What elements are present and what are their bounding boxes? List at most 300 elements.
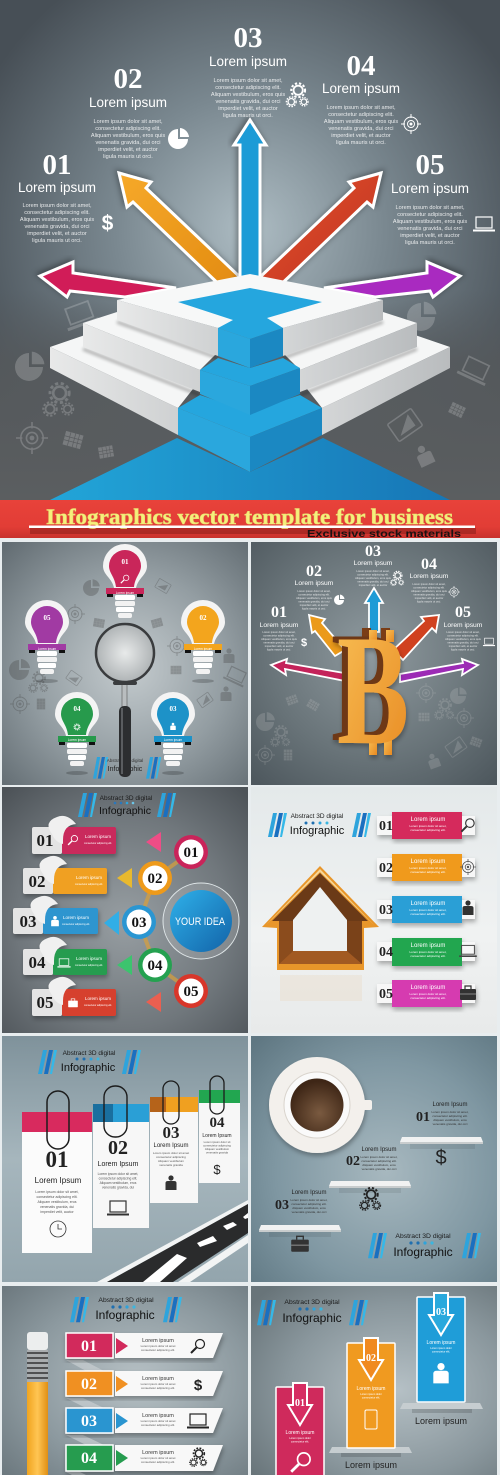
item 03 text: Lorem ipsum dolor sit amet, — [290, 1198, 328, 1202]
bitcoin item 01 — [260, 604, 307, 652]
bulb 01 — [103, 544, 147, 627]
row 05: Lorem ipsum — [411, 985, 445, 991]
card 03 blue: 03 — [436, 1307, 446, 1318]
banner subtitle: Exclusive stock materials — [307, 528, 461, 540]
logo behind magnifier: Abstract 3D digital — [107, 758, 143, 763]
row 01: consectetur adipiscing elit. — [141, 1348, 175, 1352]
row 01: 01 — [81, 1338, 97, 1355]
card 01: Lorem Ipsum — [35, 1176, 82, 1185]
bulb 02: Lorem ipsum — [194, 647, 213, 651]
arrow: 05 purple — [324, 262, 460, 297]
shelf lower — [329, 1447, 412, 1457]
bitcoin item 04: venenatis gravida, dui orci — [413, 592, 445, 596]
card 02: Lorem Ipsum — [98, 1161, 139, 1168]
icon: target — [401, 114, 421, 134]
item 01 text: Lorem ipsum — [18, 180, 96, 195]
faded background icons — [15, 299, 493, 468]
card 05: consectetur adipiscing elit. — [84, 1004, 112, 1007]
card 02 — [23, 856, 107, 894]
circle 04: 04 — [148, 958, 163, 974]
row 04: consectetur adipiscing elit. — [141, 1460, 175, 1464]
item 02 text: Lorem Ipsum — [361, 1147, 397, 1153]
magnifying glass — [96, 624, 154, 777]
card 01: Lorem ipsum — [85, 834, 111, 839]
card 01: Lorem ipsum dolor sit amet, — [35, 1190, 79, 1194]
banner rule — [29, 526, 475, 528]
item 02 text: Lorem ipsum dolor sit amet, — [360, 1155, 398, 1159]
panel: bookmark cards — [251, 1286, 497, 1475]
paper folds — [66, 1360, 104, 1475]
card 04: venenatis gravida — [206, 1150, 228, 1154]
row 04: Lorem ipsum — [142, 1450, 174, 1456]
bitcoin item 01: 01 — [271, 604, 287, 621]
card 01 pink: 01 — [295, 1398, 305, 1409]
circle 03: 03 — [132, 915, 146, 931]
card 04: Lorem ipsum — [76, 956, 102, 961]
header logo — [70, 1297, 182, 1322]
card 01: 01 — [46, 1147, 68, 1172]
panel: light bulbs and magnifier — [2, 542, 249, 785]
panel: coffee cup and shelves — [251, 1036, 497, 1282]
header logo — [368, 1233, 481, 1259]
carpet — [50, 438, 450, 500]
bitcoin item 01: Lorem ipsum — [260, 622, 299, 629]
card 05: Lorem ipsum — [85, 996, 111, 1001]
lower shelf label: Lorem ipsum — [345, 1460, 397, 1470]
item 03 text: ligula mauris ut orci. — [223, 113, 273, 119]
bulb 02 — [181, 600, 225, 683]
card 04: Aliquam vestibulum — [205, 1147, 230, 1151]
row 03: 03 — [81, 1413, 97, 1430]
item 04 text: Lorem ipsum dolor sit amet, — [326, 105, 396, 111]
bulb 01: 01 — [122, 558, 129, 566]
bitcoin item 02 — [295, 563, 344, 610]
bulb 05: 05 — [44, 614, 51, 622]
row 02: consectetur adipiscing elit. — [141, 1386, 175, 1390]
card 02: Lorem ipsum — [76, 875, 102, 880]
your idea disc: YOUR IDEA — [175, 916, 226, 928]
card 01 — [22, 1091, 92, 1253]
card 02: Lorem ipsum dolor sit amet, — [98, 1172, 138, 1176]
row 01: Lorem ipsum dolor sit amet — [141, 1344, 176, 1348]
item 01 text: 01 — [42, 149, 72, 181]
row 03: Lorem ipsum dolor sit amet — [141, 1419, 176, 1423]
item 01 text: 01 — [416, 1110, 430, 1125]
bulb 03 — [151, 692, 195, 775]
bitcoin item 02: consectetur adipiscing elit. — [298, 592, 330, 596]
row 03: 03 — [379, 903, 393, 918]
row 02: Lorem ipsum — [142, 1376, 174, 1382]
item 03 text: Lorem Ipsum — [291, 1190, 327, 1196]
bulb 04: Lorem ipsum — [68, 738, 87, 742]
card 02: 02 — [108, 1137, 128, 1159]
header logo: Abstract 3D digital — [100, 795, 153, 802]
shelf upper — [400, 1403, 483, 1413]
circle 01 — [174, 835, 208, 869]
row 02: $ — [194, 1377, 203, 1394]
row 03: Lorem ipsum — [411, 901, 445, 907]
arrow: 01 pink — [40, 262, 176, 297]
card 03 blue: consectetur elit. — [432, 1350, 450, 1354]
row 03: consectetur adipiscing elit. — [410, 912, 446, 916]
header logo: Infographic — [95, 1308, 155, 1322]
header logo — [257, 1299, 368, 1325]
card 03: Lorem ipsum — [63, 915, 89, 920]
header logo: Infographic — [282, 1311, 342, 1325]
row 05: consectetur adipiscing elit. — [410, 996, 446, 1000]
card 02: consectetur adipiscing elit. — [99, 1176, 137, 1180]
bitcoin item 05: venenatis gravida, dui orci — [447, 640, 479, 644]
icon: gears — [360, 1188, 381, 1210]
card 03: venenatis gravida — [159, 1163, 183, 1167]
card 03: 03 — [162, 1123, 180, 1142]
row 05 — [377, 980, 476, 1007]
card 01 — [32, 816, 116, 854]
item 01 text: consectetur adipiscing elit. — [24, 210, 90, 216]
row 02: Lorem ipsum — [411, 859, 445, 865]
bitcoin item 03: imperdiet velit, et auctor — [359, 583, 387, 587]
item 05 text: ligula mauris ut orci. — [405, 240, 455, 246]
item 04 text: imperdiet velit, et auctor — [331, 133, 391, 139]
circle 03 — [122, 905, 156, 939]
step 3 — [50, 335, 200, 408]
item 05 text: imperdiet velit, et auctor — [400, 233, 460, 239]
house reflection — [280, 975, 362, 1001]
bitcoin item 05: imperdiet velit, et auctor — [449, 644, 477, 648]
bitcoin item 05 — [444, 604, 495, 652]
panel: pencil list — [2, 1286, 248, 1475]
item 03 text: Lorem ipsum dolor sit amet, — [213, 78, 283, 84]
connectors — [139, 852, 191, 991]
card 01: venenatis gravida, dui — [40, 1205, 74, 1209]
bulb 04 — [55, 692, 99, 775]
item 02 text: ligula mauris ut orci. — [103, 154, 153, 160]
card 03 blue — [417, 1293, 465, 1402]
arrow: 04 red — [258, 173, 381, 293]
card 03 blue: Lorem ipsum dolor — [430, 1346, 452, 1350]
bitcoin item 02: venenatis gravida, dui orci — [298, 600, 330, 604]
item 01 text: Lorem Ipsum — [432, 1102, 468, 1108]
faded background icons — [255, 683, 483, 770]
bulb 03: Lorem ipsum — [164, 738, 183, 742]
row 03: Lorem ipsum — [142, 1413, 174, 1419]
card 05 — [32, 977, 116, 1016]
row 01: consectetur adipiscing elit. — [410, 828, 446, 832]
bitcoin item 03: Lorem ipsum — [354, 560, 393, 567]
item 01 text — [18, 149, 96, 244]
circle 02: 02 — [148, 871, 162, 887]
bulb 01: Lorem ipsum — [116, 591, 135, 595]
card 03: consectetur adipiscing — [156, 1155, 186, 1159]
step 1 — [117, 274, 383, 328]
circle 04 — [138, 948, 172, 982]
item 05 text: Aliquam vestibulum, eros quis — [393, 219, 467, 225]
card 01 pink: Lorem ipsum dolor — [289, 1436, 311, 1440]
bitcoin item 01: imperdiet velit, et auctor — [265, 644, 293, 648]
item 03 text: venenatis gravida, dui orci — [216, 99, 280, 105]
bitcoin item 01: $ — [301, 637, 307, 649]
arrow: bitcoin 04 red — [393, 615, 439, 660]
row 01: Lorem ipsum — [411, 817, 445, 823]
bitcoin item 04: consectetur adipiscing elit. — [413, 586, 445, 590]
bitcoin item 02: Lorem ipsum dolor sit amet, — [297, 589, 331, 593]
pencil — [27, 1332, 48, 1475]
bitcoin item 05: consectetur adipiscing elit. — [447, 634, 479, 638]
item 02 text: Lorem ipsum dolor sit amet, — [93, 119, 163, 125]
panel: bitcoin arrows — [251, 542, 497, 785]
row 04: Lorem ipsum dolor sit amet — [141, 1456, 176, 1460]
bulb 02: 02 — [200, 614, 207, 622]
item 03 text: consectetur adipiscing elit. — [215, 85, 281, 91]
bulb 05: Lorem ipsum — [38, 647, 57, 651]
item 01 text: consectetur adipiscing elit. — [432, 1114, 468, 1118]
bitcoin item 04: Lorem ipsum dolor sit amet, — [412, 582, 446, 586]
card 01 pink: Lorem ipsum — [286, 1430, 314, 1436]
upper shelf label: Lorem ipsum — [415, 1416, 467, 1426]
shelf 2 — [329, 1181, 411, 1193]
bitcoin item 02: imperdiet velit, et auctor — [300, 603, 328, 607]
card 02 orange: Lorem ipsum dolor — [360, 1392, 382, 1396]
row 04: 04 — [81, 1450, 97, 1467]
row 03 — [66, 1408, 223, 1433]
card 02: 02 — [28, 872, 46, 891]
house — [262, 866, 379, 970]
row 04 — [377, 938, 477, 966]
bitcoin item 05: Aliquam vestibulum, eros quis — [445, 637, 482, 641]
card 02: consectetur adipiscing elit. — [75, 883, 103, 886]
bitcoin item 04 — [410, 556, 460, 604]
card 04: $ — [213, 1162, 221, 1177]
header logo: Abstract 3D digital — [284, 1299, 340, 1306]
card 03 — [13, 896, 98, 934]
row 04: 04 — [379, 945, 393, 960]
card 02 orange: consectetur elit. — [362, 1396, 380, 1400]
arrow: bitcoin 01 pink — [271, 659, 350, 682]
card 03: consectetur adipiscing elit. — [62, 923, 90, 926]
row 02: Lorem ipsum dolor sit amet, — [409, 866, 447, 870]
row 02 — [377, 854, 476, 881]
item 04 text: Aliquam vestibulum, eros quis — [324, 119, 398, 125]
item 02 text: venenatis gravida, dui orci — [362, 1167, 397, 1171]
item 01 text: Aliquam vestibulum, eros — [433, 1118, 467, 1122]
faded background icons — [9, 578, 249, 714]
item 01 text: Lorem ipsum dolor sit amet, — [431, 1110, 469, 1114]
header logo: Infographic — [290, 825, 345, 837]
header logo: Infographic — [99, 805, 151, 817]
circle 01: 01 — [184, 845, 198, 861]
row 02: Lorem ipsum dolor sit amet — [141, 1382, 176, 1386]
card 03 blue: Lorem ipsum — [427, 1340, 455, 1346]
item 02 text — [346, 1147, 398, 1171]
card 02 orange: 02 — [366, 1353, 376, 1364]
card 04 — [23, 937, 107, 975]
row 04: Lorem ipsum — [411, 943, 445, 949]
card 01: 01 — [36, 831, 54, 850]
item 05 text: 05 — [416, 149, 444, 181]
bulb 04: 04 — [74, 705, 81, 713]
panel: your idea — [2, 787, 248, 1033]
item 02 text: Aliquam vestibulum, eros — [362, 1163, 396, 1167]
item 05 text — [391, 149, 469, 246]
card 01 pink — [276, 1383, 324, 1475]
item 01 text: ligula mauris ut orci. — [32, 238, 82, 244]
bitcoin item 03: venenatis gravida, dui orci — [357, 580, 389, 584]
icon: gears — [286, 83, 308, 107]
item 05 text: Lorem ipsum — [391, 181, 469, 196]
item 02 text: consectetur adipiscing elit. — [95, 126, 161, 132]
item 02 text: 02 — [346, 1154, 360, 1169]
panel: house — [251, 787, 497, 1033]
item 02 text: Lorem ipsum — [89, 95, 167, 110]
item 02 text: Aliquam vestibulum, eros quis — [91, 133, 165, 139]
bitcoin symbol: B — [331, 600, 403, 775]
bitcoin item 01: consectetur adipiscing elit. — [263, 634, 295, 638]
item 01 text: Lorem ipsum dolor sit amet, — [22, 203, 92, 209]
bitcoin item 04: Aliquam vestibulum, eros quis — [411, 589, 448, 593]
item 05 text: consectetur adipiscing elit. — [397, 212, 463, 218]
bitcoin item 04: 04 — [421, 556, 437, 573]
card 02: venenatis gravida, dui — [102, 1186, 134, 1190]
bitcoin item 01: Aliquam vestibulum, eros quis — [261, 637, 298, 641]
blue column — [178, 395, 322, 437]
bitcoin item 04: Lorem ipsum — [410, 573, 449, 580]
bitcoin item 03 — [354, 543, 404, 587]
header logo: Infographic — [61, 1062, 116, 1074]
card 03: Aliquam vestibulum — [158, 1159, 185, 1163]
row 03: consectetur adipiscing elit. — [141, 1423, 175, 1427]
item 03 text: Aliquam vestibulum, eros — [292, 1206, 326, 1210]
row 03 — [377, 896, 475, 923]
logo behind magnifier: Infographic — [108, 766, 143, 773]
row 05: Lorem ipsum dolor sit amet, — [409, 992, 447, 996]
banner — [0, 500, 500, 540]
item 01 text: Aliquam vestibulum, eros quis — [20, 217, 94, 223]
card 02 — [93, 1086, 149, 1228]
bitcoin item 05: Lorem ipsum dolor sit amet, — [446, 630, 480, 634]
circle 02 — [138, 861, 172, 895]
bitcoin item 05: 05 — [455, 604, 471, 621]
your idea disc — [163, 883, 239, 959]
icon: laptop — [473, 217, 495, 230]
hero background — [0, 0, 500, 500]
bitcoin item 05: Lorem ipsum — [444, 622, 483, 629]
logo behind magnifier — [93, 757, 161, 779]
bitcoin item 04: imperdiet velit, et auctor — [415, 596, 443, 600]
card 01: consectetur adipiscing elit. — [36, 1195, 78, 1199]
step 2 — [83, 312, 218, 370]
item 03 text: consectetur adipiscing elit. — [291, 1202, 327, 1206]
item 02 text: 02 — [114, 63, 142, 95]
row 01: 01 — [379, 819, 393, 834]
bitcoin item 03: Lorem ipsum dolor sit amet, — [356, 569, 390, 573]
bulb 03: 03 — [170, 705, 177, 713]
banner title: Infographics vector template for business — [46, 504, 453, 529]
item 03 text: venenatis gravida, dui orci — [292, 1210, 327, 1214]
icon: pie chart — [168, 128, 189, 149]
arrow: 03 blue — [234, 120, 266, 285]
card 04 — [199, 1076, 240, 1183]
icon: dollar: $ — [102, 212, 114, 235]
bitcoin item 02: Lorem ipsum — [295, 580, 334, 587]
item 03 text: 03 — [275, 1198, 289, 1213]
header logo: Abstract 3D digital — [291, 813, 344, 820]
card 04: Lorem Ipsum — [202, 1133, 232, 1139]
arrow: 02 orange — [119, 173, 242, 293]
icon: briefcase — [291, 1236, 309, 1252]
header logo: Abstract 3D digital — [63, 1050, 116, 1057]
bitcoin item 03: 03 — [365, 543, 381, 560]
item 02 text: consectetur adipiscing elit. — [361, 1159, 397, 1163]
card 04: consectetur adipiscing — [203, 1144, 231, 1148]
card 04: 04 — [210, 1115, 225, 1131]
header logo: Infographic — [393, 1245, 453, 1259]
item 04 text: Lorem ipsum — [322, 81, 400, 96]
shelf 3 — [259, 1225, 341, 1237]
bulb 05 — [25, 600, 69, 683]
item 02 text: imperdiet velit, et auctor — [98, 147, 158, 153]
row 01: Lorem ipsum — [142, 1338, 174, 1344]
bitcoin item 02: Aliquam vestibulum, eros quis — [296, 596, 333, 600]
item 04 text — [322, 50, 400, 146]
arrow: bitcoin 03 blue — [365, 588, 383, 632]
item 04 text: 04 — [346, 50, 376, 82]
shelf 1 — [400, 1137, 483, 1149]
card 02 orange: Lorem ipsum — [357, 1386, 385, 1392]
panel: paper clips and road — [2, 1036, 248, 1282]
item 03 text: Lorem ipsum — [209, 54, 287, 69]
item 05 text: venenatis gravida, dui orci — [398, 226, 462, 232]
card 01: Aliquam vestibulum, eros — [37, 1200, 77, 1204]
bitcoin item 04: ligula mauris ut orci. — [417, 600, 441, 604]
arrow: bitcoin 02 orange — [309, 615, 345, 656]
item 03 text — [275, 1190, 328, 1214]
item 03 text — [209, 22, 287, 119]
bitcoin item 03: consectetur adipiscing elit. — [357, 572, 389, 576]
header logo: Abstract 3D digital — [395, 1233, 451, 1240]
card 03: 03 — [20, 912, 36, 931]
icon: dollar: $ — [435, 1147, 447, 1169]
bitcoin item 03: Aliquam vestibulum, eros quis — [355, 576, 392, 580]
header logo: Abstract 3D digital — [98, 1297, 154, 1304]
row 04 — [66, 1445, 223, 1471]
bitcoin item 02: 02 — [306, 563, 322, 580]
bitcoin item 01: ligula mauris ut orci. — [267, 648, 291, 652]
circle 05: 05 — [184, 984, 198, 1000]
row 02 — [66, 1371, 223, 1396]
bitcoin symbol: B — [337, 603, 409, 778]
card 02 orange — [347, 1338, 395, 1448]
item 01 text: venenatis gravida, dui orci — [24, 224, 90, 230]
row 02: 02 — [81, 1376, 97, 1393]
header logo — [78, 793, 176, 817]
card 04: 04 — [28, 953, 46, 972]
item 03 text: 03 — [234, 22, 262, 54]
item 03 text: imperdiet velit, et auctor — [218, 106, 278, 112]
card 03: Lorem ipsum dolor sit amet — [153, 1151, 189, 1155]
item 04 text: venenatis gravida, dui orci — [328, 126, 394, 132]
row 02: 02 — [379, 861, 393, 876]
row 01 — [66, 1333, 223, 1358]
card 01: consectetur adipiscing elit. — [84, 842, 112, 845]
item 04 text: ligula mauris ut orci. — [336, 140, 386, 146]
row 05: 05 — [379, 987, 393, 1002]
bitcoin item 05: ligula mauris ut orci. — [451, 648, 475, 652]
arrow: bitcoin 05 purple — [400, 659, 478, 682]
row 03: Lorem ipsum dolor sit amet, — [409, 908, 447, 912]
bitcoin item 02: ligula mauris ut orci. — [302, 606, 326, 610]
item 02 text — [89, 63, 167, 160]
podium — [50, 274, 450, 472]
